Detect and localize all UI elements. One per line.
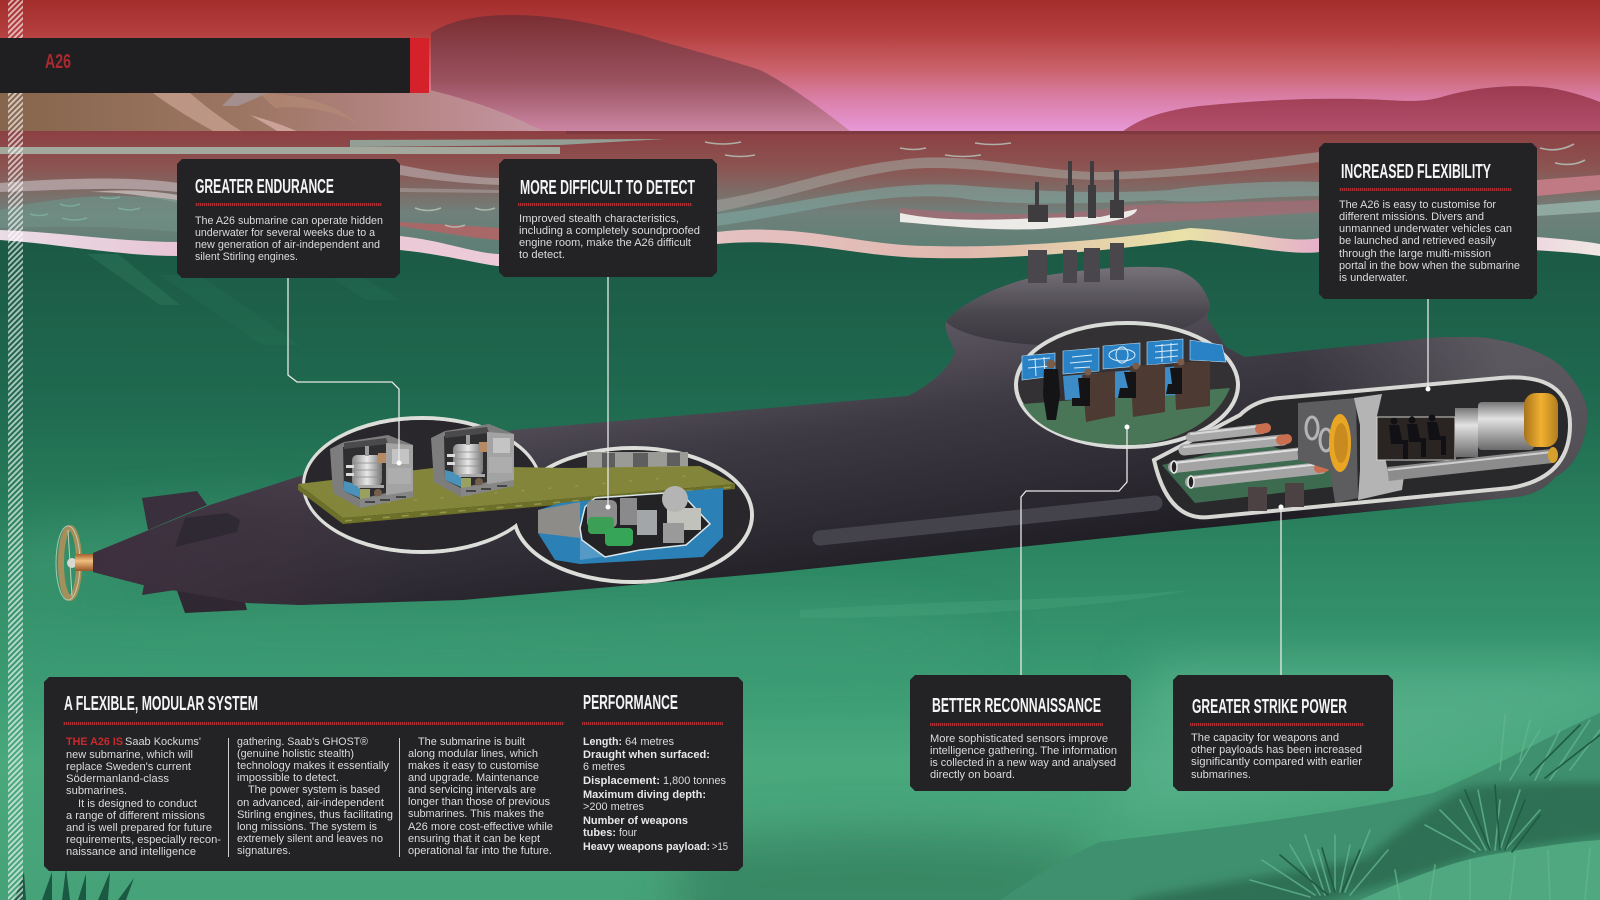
body text xyxy=(195,215,383,263)
column 2 text: impossible to detect. xyxy=(237,772,339,784)
column 2 text: on advanced, air-independent xyxy=(237,797,384,809)
propeller xyxy=(56,526,94,600)
column 1 text: and is well prepared for future xyxy=(66,822,212,834)
column 2 text: The power system is based xyxy=(248,784,380,796)
heading: GREATER STRIKE POWER xyxy=(1192,696,1347,718)
body text: significantly compared with earlier xyxy=(1191,756,1362,768)
cutaway: engines and engine room xyxy=(298,418,752,582)
performance specifications: Displacement: xyxy=(583,775,660,787)
performance specifications xyxy=(583,736,728,853)
seabed grass xyxy=(1250,715,1600,900)
heading: INCREASED FLEXIBILITY xyxy=(1341,161,1491,183)
body text: The A26 submarine can operate hidden xyxy=(195,215,383,227)
weapons tubes xyxy=(1174,426,1325,482)
performance specifications: four xyxy=(619,827,637,839)
column 2 text: extremely silent and leaves no xyxy=(237,833,383,845)
body text: The A26 is easy to customise for xyxy=(1339,199,1496,211)
body text: silent Stirling engines. xyxy=(195,251,298,263)
column 2 text: (genuine holistic stealth) xyxy=(237,748,354,760)
column 2 text: long missions. The system is xyxy=(237,821,377,833)
submarine xyxy=(56,243,1588,613)
column 3 text: makes it easy to customise xyxy=(408,760,539,772)
performance specifications: Draught when surfaced: xyxy=(583,749,710,761)
heading: MORE DIFFICULT TO DETECT xyxy=(520,177,695,199)
column 3 text: and servicing intervals are xyxy=(408,784,536,796)
operator seats xyxy=(1082,361,1210,422)
body text: underwater for several weeks due to a xyxy=(195,227,376,239)
column 3 text xyxy=(408,736,553,857)
connector: better reconnaissance xyxy=(1021,424,1130,675)
panel: better reconnaissance xyxy=(910,675,1131,791)
header banner xyxy=(0,38,429,93)
panel: more difficult to detect xyxy=(499,159,717,277)
body text: submarines. xyxy=(1191,769,1251,781)
Stirling engine 2 xyxy=(431,424,514,497)
cutaway: control room xyxy=(1016,323,1238,447)
column 1 text: Saab Kockums' xyxy=(125,736,201,748)
column 3 text: longer than those of previous xyxy=(408,796,550,808)
body text: including a completely soundproofed xyxy=(519,225,700,237)
divers xyxy=(1389,414,1446,459)
performance specifications: 1,800 tonnes xyxy=(663,775,726,787)
side stripe xyxy=(820,503,1155,538)
side plane xyxy=(175,513,240,547)
body text xyxy=(930,733,1117,781)
column 3 text: ensuring that it can be kept xyxy=(408,833,540,845)
column 1 text xyxy=(66,736,221,858)
column 2 text: Stirling engines, thus facilitating xyxy=(237,809,393,821)
body text xyxy=(519,213,700,261)
pressure frame xyxy=(1354,394,1404,500)
column 3 text: operational far into the future. xyxy=(408,845,552,857)
banner label: A26 xyxy=(45,51,71,73)
panel: greater strike power xyxy=(1173,675,1393,791)
performance specifications: Heavy weapons payload: xyxy=(583,841,710,853)
body text: through the large multi-mission xyxy=(1339,248,1491,260)
body text: is collected in a new way and analysed xyxy=(930,757,1116,769)
body text: intelligence gathering. The information xyxy=(930,745,1117,757)
body text: Improved stealth characteristics, xyxy=(519,213,679,225)
column 1 text: new submarine, which will xyxy=(66,749,193,761)
column 2 text: signatures. xyxy=(237,845,291,857)
screens xyxy=(1022,339,1226,380)
panel: increased flexibility xyxy=(1319,143,1537,299)
body text: be launched and retrieved easily xyxy=(1339,235,1496,247)
performance specifications: 6 metres xyxy=(583,761,625,773)
body text: The capacity for weapons and xyxy=(1191,732,1339,744)
column 1 text: Södermanland-class xyxy=(66,773,170,785)
sail xyxy=(946,267,1210,346)
deck xyxy=(298,466,735,524)
connector: difficult to detect xyxy=(606,277,610,510)
crew xyxy=(1043,358,1184,420)
column 2 text xyxy=(237,736,393,857)
column 3 text: submarines. This makes the xyxy=(408,808,544,820)
body text xyxy=(1191,732,1362,781)
body text: portal in the bow when the submarine xyxy=(1339,260,1520,272)
performance specifications: >15 xyxy=(712,841,728,853)
column 1 text: It is designed to conduct xyxy=(78,798,197,810)
masts below the surface xyxy=(1028,243,1124,283)
body text xyxy=(1339,199,1520,284)
column 1 text: submarines. xyxy=(66,785,127,797)
heading: GREATER ENDURANCE xyxy=(195,176,334,198)
column 1 text: naissance and intelligence xyxy=(66,846,196,858)
performance specifications: >200 metres xyxy=(583,801,644,813)
body text: new generation of air-independent and xyxy=(195,239,380,251)
column 2 text: gathering. Saab's GHOST® xyxy=(237,736,368,748)
column 2 text: technology makes it essentially xyxy=(237,760,389,772)
connector: greater endurance xyxy=(288,278,402,466)
connector: greater strike power xyxy=(1278,504,1284,675)
body text: directly on board. xyxy=(930,769,1015,781)
body text: other payloads has been increased xyxy=(1191,744,1362,756)
panel: greater endurance xyxy=(177,159,400,278)
performance specifications: Maximum diving depth: xyxy=(583,789,706,801)
performance specifications: Number of weapons xyxy=(583,815,688,827)
column 3 text: and upgrade. Maintenance xyxy=(408,772,539,784)
panel: a flexible, modular system and performance xyxy=(44,677,743,871)
column 3 text: A26 more cost-effective while xyxy=(408,821,553,833)
performance specifications: tubes: xyxy=(583,827,616,839)
tail fins xyxy=(142,491,247,613)
body text: engine room, make the A26 difficult xyxy=(519,237,691,249)
masts above the surface xyxy=(1028,161,1124,222)
hull xyxy=(93,267,1588,605)
body text: unmanned underwater vehicles can xyxy=(1339,223,1512,235)
Stirling engine 1 xyxy=(330,435,413,508)
body text: is underwater. xyxy=(1339,272,1408,284)
body text: More sophisticated sensors improve xyxy=(930,733,1108,745)
connector: increased flexibility xyxy=(1426,299,1430,392)
heading: performance: PERFORMANCE xyxy=(583,692,678,714)
heading: modular system: A FLEXIBLE, MODULAR SYSTEM xyxy=(64,693,258,715)
performance specifications: Length: xyxy=(583,736,622,748)
column 1 text: a range of different missions xyxy=(66,810,206,822)
engine room xyxy=(538,486,723,564)
column 3 text: along modular lines, which xyxy=(408,748,538,760)
deck building xyxy=(587,452,688,482)
performance specifications: 64 metres xyxy=(625,736,674,748)
column 1 text: replace Sweden's current xyxy=(66,761,191,773)
column 1 text: requirements, especially recon- xyxy=(66,834,221,846)
body text: different missions. Divers and xyxy=(1339,211,1484,223)
column 3 text: The submarine is built xyxy=(418,736,525,748)
column 1 text: THE A26 IS xyxy=(66,736,123,748)
body text: to detect. xyxy=(519,249,565,261)
cutaway: weapons tubes and multi-mission portal xyxy=(1154,377,1570,517)
heading: BETTER RECONNAISSANCE xyxy=(932,695,1101,717)
